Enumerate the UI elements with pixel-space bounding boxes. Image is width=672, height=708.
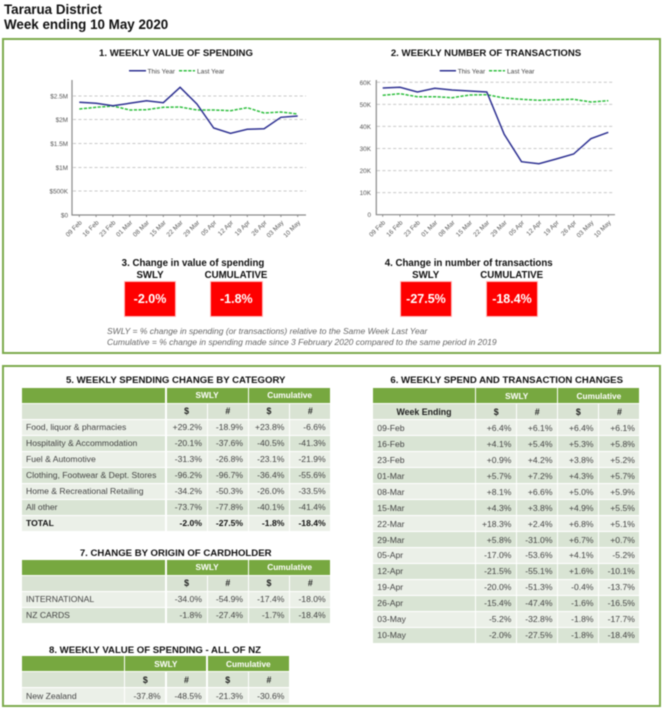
table: weekly spend and transaction changes: +6.4% bbox=[569, 423, 594, 433]
line chart: weekly number of transactions: Last Year bbox=[507, 68, 535, 75]
table: weekly spend and transaction changes: +2.4% bbox=[528, 519, 552, 529]
table: weekly spend and transaction changes: 19-Apr bbox=[377, 582, 403, 592]
table: weekly spend and transaction changes: 01-Mar bbox=[377, 471, 405, 481]
table: weekly spend and transaction changes: -53.6% bbox=[525, 550, 552, 560]
heading: chart 1: 1. WEEKLY VALUE OF SPENDING bbox=[99, 48, 253, 58]
table: weekly spending change by category: Food, liquor & pharmacies bbox=[26, 422, 126, 432]
table: weekly spending change by category: TOTAL bbox=[26, 518, 54, 528]
table: weekly spend and transaction changes: -16.5% bbox=[608, 598, 635, 608]
table: weekly spend and transaction changes: +6.7% bbox=[569, 534, 594, 544]
table: weekly spend and transaction changes: -21.5% bbox=[484, 566, 511, 576]
line chart: weekly value of spending: $500K bbox=[50, 188, 69, 196]
table: weekly spend and transaction changes: +0.9% bbox=[487, 455, 511, 465]
table: weekly spending change by category: -20.1% bbox=[175, 438, 202, 448]
table: weekly value of spending, all of NZ: Cumulative bbox=[226, 659, 271, 669]
table: weekly spending change by category: -26.0% bbox=[257, 486, 284, 496]
line chart: weekly number of transactions: 23 Feb bbox=[403, 219, 422, 238]
line chart: weekly number of transactions: 40K bbox=[360, 124, 372, 131]
line chart: weekly value of spending: Last Year bbox=[197, 68, 225, 75]
table: weekly spend and transaction changes: +5.2% bbox=[610, 455, 635, 465]
table: change by origin of cardholder: -34.0% bbox=[175, 594, 202, 604]
line chart: weekly value of spending: 26 Apr bbox=[250, 219, 269, 237]
label: cumulative transactions: CUMULATIVE bbox=[480, 270, 543, 281]
table: weekly spending change by category: Fuel & Automotive bbox=[26, 454, 96, 464]
line chart: weekly value of spending: 09 Feb bbox=[65, 219, 84, 238]
table: weekly spend and transaction changes: +5.8% bbox=[487, 534, 511, 544]
table: weekly spend and transaction changes: +5.9% bbox=[610, 487, 635, 497]
table: weekly spend and transaction changes: 23-Feb bbox=[377, 455, 405, 465]
line chart: weekly number of transactions bbox=[359, 68, 616, 239]
table: weekly spending change by category: -6.6% bbox=[303, 422, 326, 432]
table: weekly value of spending, all of NZ: $ bbox=[143, 675, 148, 685]
table: weekly spend and transaction changes: +6.8% bbox=[569, 519, 594, 529]
table: weekly spend and transaction changes: +5.3% bbox=[569, 439, 594, 449]
table: weekly spend and transaction changes: +8.1% bbox=[487, 487, 511, 497]
line chart: weekly value of spending: 05 Apr bbox=[200, 219, 219, 237]
table: weekly spending change by category: $ bbox=[184, 406, 189, 416]
label: SWLY spending: SWLY bbox=[136, 270, 164, 281]
table: weekly spend and transaction changes bbox=[372, 387, 640, 644]
table: weekly value of spending, all of NZ: -48.5% bbox=[175, 691, 202, 701]
table: weekly spend and transaction changes: +5.1% bbox=[610, 519, 635, 529]
KPI: spending SWLY: -2.0% bbox=[134, 292, 166, 306]
KPI: spending cumulative: -1.8% bbox=[220, 292, 253, 306]
line chart: weekly number of transactions: 10 May bbox=[593, 219, 613, 239]
KPI: transactions SWLY bbox=[400, 281, 452, 317]
table: weekly spend and transaction changes: 08-Mar bbox=[377, 487, 405, 497]
table: weekly spend and transaction changes: +6.4% bbox=[487, 423, 511, 433]
heading: table 7: 7. CHANGE BY ORIGIN OF CARDHOLDER bbox=[80, 548, 272, 559]
footnote: definitions: SWLY = % change in spending (or transactions) relative to the Same Week Last Year bbox=[107, 326, 427, 336]
line chart: weekly number of transactions: 0 bbox=[367, 212, 371, 219]
table: weekly spending change by category: Cumulative bbox=[267, 390, 312, 400]
table: weekly spend and transaction changes: +3.8% bbox=[569, 455, 594, 465]
table: weekly spend and transaction changes: 16-Feb bbox=[377, 439, 405, 449]
line chart: weekly number of transactions: 05 Apr bbox=[508, 219, 527, 237]
table: weekly spend and transaction changes: -2.0% bbox=[489, 630, 511, 640]
line chart: weekly value of spending: $0 bbox=[61, 212, 68, 220]
table: weekly spend and transaction changes: -15.4% bbox=[484, 598, 511, 608]
table: weekly spending change by category: -96.7% bbox=[216, 470, 243, 480]
table: weekly spend and transaction changes: +4.1% bbox=[569, 550, 594, 560]
panel: tables bbox=[2, 365, 661, 707]
table: change by origin of cardholder: $ bbox=[184, 578, 189, 588]
line chart: weekly value of spending: 12 Apr bbox=[217, 219, 236, 237]
table: weekly spend and transaction changes: +4.3% bbox=[487, 503, 511, 513]
table: weekly spend and transaction changes: -1.6% bbox=[571, 598, 594, 608]
line chart: weekly value of spending: 22 Mar bbox=[165, 219, 185, 238]
table: weekly spend and transaction changes: -20.0% bbox=[484, 582, 511, 592]
table: weekly spend and transaction changes: -5.2% bbox=[489, 614, 511, 624]
table: weekly spend and transaction changes: 03-May bbox=[377, 614, 406, 624]
table: weekly spend and transaction changes: $ bbox=[494, 407, 499, 417]
table: weekly spend and transaction changes: 15-Mar bbox=[377, 503, 405, 513]
line chart: weekly number of transactions: 30K bbox=[360, 146, 372, 153]
table: change by origin of cardholder: -18.0% bbox=[298, 594, 326, 604]
line chart: weekly value of spending: $1M bbox=[56, 165, 68, 172]
table: weekly spending change by category: -23.1% bbox=[257, 454, 284, 464]
line chart: weekly value of spending bbox=[49, 68, 306, 239]
table: weekly spend and transaction changes: 09-Feb bbox=[377, 423, 405, 433]
table: weekly spend and transaction changes: -27.5% bbox=[525, 630, 552, 640]
table: weekly spend and transaction changes: +7.2% bbox=[528, 471, 552, 481]
table: weekly spending change by category: -40.1% bbox=[257, 502, 284, 512]
line chart: weekly number of transactions: 20K bbox=[360, 168, 372, 175]
table: weekly spending change by category: -34.2% bbox=[175, 486, 202, 496]
table: weekly spend and transaction changes: 29-Mar bbox=[377, 534, 405, 544]
table: weekly spending change by category: -2.0% bbox=[180, 518, 202, 528]
line chart: weekly number of transactions: 29 Mar bbox=[490, 219, 509, 238]
title: Tararua District, week ending 10 May 2020: Week ending 10 May 2020 bbox=[4, 17, 168, 32]
table: weekly spending change by category: -18.4% bbox=[298, 518, 326, 528]
heading: change in number of transactions: 4. Change in number of transactions bbox=[385, 258, 553, 268]
line chart: weekly value of spending: 29 Mar bbox=[182, 219, 202, 238]
line chart: weekly number of transactions: 15 Mar bbox=[455, 219, 475, 238]
table: weekly spending change by category: -77.8% bbox=[216, 502, 243, 512]
table: weekly value of spending, all of NZ: # bbox=[184, 675, 189, 685]
table: weekly spend and transaction changes: +4.9% bbox=[569, 503, 594, 513]
table: weekly spend and transaction changes: -1.8% bbox=[571, 630, 594, 640]
line chart: weekly value of spending: 10 May bbox=[282, 219, 303, 239]
heading: table 6: 6. WEEKLY SPEND AND TRANSACTION CHANGES bbox=[390, 374, 623, 386]
table: weekly value of spending, all of NZ bbox=[21, 655, 290, 703]
table: weekly spend and transaction changes: +6.6% bbox=[528, 487, 552, 497]
table: weekly spend and transaction changes: $ bbox=[576, 407, 581, 417]
title: Tararua District, week ending 10 May 2020 bbox=[3, 2, 168, 33]
table: weekly spending change by category: -41.4% bbox=[298, 502, 326, 512]
table: weekly spend and transaction changes: +5.7% bbox=[487, 471, 511, 481]
table: weekly spending change by category: +29.2% bbox=[173, 422, 202, 432]
table: weekly spending change by category: Hospitality & Accommodation bbox=[26, 438, 137, 448]
table: weekly spending change by category: -73.7% bbox=[175, 502, 202, 512]
line chart: weekly value of spending: 01 Mar bbox=[115, 219, 135, 238]
table: weekly spend and transaction changes: -31.0% bbox=[525, 534, 552, 544]
table: change by origin of cardholder: -1.8% bbox=[180, 610, 202, 620]
table: weekly spend and transaction changes: +5.7% bbox=[610, 471, 635, 481]
table: weekly spend and transaction changes: -55.1% bbox=[525, 566, 552, 576]
table: weekly spend and transaction changes: +3.8% bbox=[528, 503, 552, 513]
label: cumulative spending: CUMULATIVE bbox=[205, 270, 267, 281]
line chart: weekly number of transactions: 60K bbox=[360, 80, 372, 87]
table: weekly spend and transaction changes: 05-Apr bbox=[377, 550, 403, 560]
table: weekly spend and transaction changes: 26-Apr bbox=[377, 598, 403, 608]
table: weekly spending change by category: +23.8% bbox=[255, 422, 284, 432]
table: weekly spend and transaction changes: -17.7% bbox=[608, 614, 635, 624]
line chart: weekly number of transactions: This Year bbox=[458, 68, 486, 75]
table: weekly spend and transaction changes: +5.5% bbox=[610, 503, 635, 513]
KPI: spending SWLY bbox=[124, 281, 176, 317]
table: weekly spend and transaction changes: +4.3% bbox=[569, 471, 594, 481]
line chart: weekly number of transactions: 26 Apr bbox=[560, 219, 579, 237]
table: weekly spending change by category bbox=[21, 387, 331, 531]
label: SWLY transactions: SWLY bbox=[412, 270, 439, 281]
table: weekly spending change by category: -96.2% bbox=[175, 470, 202, 480]
KPI: transactions cumulative bbox=[486, 281, 538, 317]
table: weekly spending change by category: -37.6% bbox=[216, 438, 243, 448]
table: change by origin of cardholder: NZ CARDS bbox=[26, 610, 70, 620]
table: weekly spending change by category: -21.9% bbox=[298, 454, 326, 464]
table: weekly spend and transaction changes: +5.0% bbox=[569, 487, 594, 497]
line chart: weekly value of spending: $2M bbox=[56, 117, 68, 124]
line chart: weekly number of transactions: 09 Feb bbox=[368, 219, 387, 238]
table: weekly spending change by category: -1.8% bbox=[262, 518, 284, 528]
table: weekly spend and transaction changes: +1.6% bbox=[569, 566, 594, 576]
table: weekly value of spending, all of NZ: SWLY bbox=[154, 659, 177, 669]
table: weekly spend and transaction changes: # bbox=[617, 407, 622, 417]
line chart: weekly value of spending: 15 Mar bbox=[149, 219, 168, 238]
line chart: weekly number of transactions: 19 Apr bbox=[543, 219, 561, 237]
table: change by origin of cardholder: $ bbox=[267, 578, 271, 588]
line chart: weekly number of transactions: 08 Mar bbox=[437, 219, 457, 238]
table: weekly value of spending, all of NZ: -21.3% bbox=[216, 691, 243, 701]
line chart: weekly value of spending: This Year bbox=[148, 68, 176, 75]
table: weekly spend and transaction changes: +5.4% bbox=[528, 439, 552, 449]
table: weekly spend and transaction changes: 10-May bbox=[377, 630, 406, 640]
table: change by origin of cardholder: Cumulative bbox=[267, 562, 312, 572]
table: change by origin of cardholder: # bbox=[225, 578, 230, 588]
line chart: weekly number of transactions: 12 Apr bbox=[525, 219, 544, 237]
table: weekly value of spending, all of NZ: -37.8% bbox=[133, 691, 161, 701]
table: weekly spend and transaction changes: -1.8% bbox=[571, 614, 594, 624]
line chart: weekly value of spending: 03 May bbox=[266, 219, 286, 239]
table: weekly spend and transaction changes: Cumulative bbox=[577, 391, 621, 401]
table: weekly spending change by category: -55.6% bbox=[298, 470, 326, 480]
table: weekly spending change by category: -50.3% bbox=[216, 486, 243, 496]
table: change by origin of cardholder: SWLY bbox=[196, 562, 219, 572]
table: weekly spending change by category: -36.4% bbox=[257, 470, 284, 480]
table: weekly spending change by category: Clothing, Footwear & Dept. Stores bbox=[26, 470, 156, 480]
table: weekly spending change by category: # bbox=[308, 406, 313, 416]
table: change by origin of cardholder: -27.4% bbox=[216, 610, 243, 620]
table: weekly spend and transaction changes: +0.7% bbox=[610, 534, 635, 544]
line chart: weekly value of spending: $1.5M bbox=[50, 141, 68, 148]
KPI: transactions cumulative: -18.4% bbox=[492, 292, 532, 306]
table: weekly value of spending, all of NZ: -30.6% bbox=[257, 691, 284, 701]
table: weekly spend and transaction changes: +6.1% bbox=[528, 423, 552, 433]
table: weekly spending change by category: -18.9% bbox=[216, 422, 243, 432]
table: weekly spending change by category: -40.5% bbox=[257, 438, 284, 448]
table: weekly spending change by category: SWLY bbox=[196, 390, 219, 400]
table: weekly spend and transaction changes: -13.7% bbox=[608, 582, 635, 592]
table: weekly spend and transaction changes: -18.4% bbox=[608, 630, 635, 640]
table: weekly value of spending, all of NZ: # bbox=[267, 675, 271, 685]
footnote: definitions bbox=[106, 326, 498, 348]
table: weekly spend and transaction changes: -0.4% bbox=[571, 582, 594, 592]
table: weekly spend and transaction changes: Week Ending bbox=[396, 407, 452, 417]
table: weekly spending change by category: $ bbox=[267, 406, 271, 416]
table: weekly spend and transaction changes: +18.3% bbox=[482, 519, 511, 529]
table: weekly spend and transaction changes: # bbox=[535, 407, 540, 417]
line chart: weekly value of spending: 19 Apr bbox=[234, 219, 252, 237]
line chart: weekly value of spending: 08 Mar bbox=[132, 219, 152, 238]
table: weekly spending change by category: -31.3% bbox=[175, 454, 202, 464]
table: weekly spend and transaction changes: 22-Mar bbox=[377, 519, 405, 529]
line chart: weekly number of transactions: 03 May bbox=[576, 219, 596, 239]
table: change by origin of cardholder: # bbox=[308, 578, 313, 588]
line chart: weekly number of transactions: 22 Mar bbox=[472, 219, 492, 238]
table: weekly spend and transaction changes: -10.1% bbox=[608, 566, 635, 576]
table: weekly spend and transaction changes: SWLY bbox=[505, 391, 528, 401]
footnote: definitions: Cumulative = % change in spending made since 3 February 2020 compared to the same period in 2019 bbox=[107, 337, 497, 347]
line chart: weekly number of transactions: 10K bbox=[360, 190, 372, 197]
line chart: weekly number of transactions: 50K bbox=[360, 102, 372, 109]
heading: table 8: 8. WEEKLY VALUE OF SPENDING - ALL OF NZ bbox=[49, 644, 261, 656]
title: Tararua District, week ending 10 May 2020: Tararua District bbox=[4, 2, 102, 16]
heading: chart 2: 2. WEEKLY NUMBER OF TRANSACTIONS bbox=[391, 48, 581, 58]
KPI: transactions SWLY: -27.5% bbox=[406, 292, 446, 306]
heading: table 5: 5. WEEKLY SPENDING CHANGE BY CATEGORY bbox=[66, 374, 285, 386]
table: change by origin of cardholder: -54.9% bbox=[216, 594, 243, 604]
line chart: weekly number of transactions: 16 Feb bbox=[385, 219, 405, 238]
table: change by origin of cardholder: INTERNATIONAL bbox=[26, 594, 94, 604]
table: weekly spend and transaction changes: -51.3% bbox=[525, 582, 552, 592]
KPI: spending cumulative bbox=[210, 281, 263, 317]
table: change by origin of cardholder: -18.4% bbox=[298, 610, 326, 620]
table: weekly spending change by category: -27.5% bbox=[216, 518, 243, 528]
table: weekly spend and transaction changes: -17.0% bbox=[484, 550, 511, 560]
table: weekly spending change by category: -41.3% bbox=[298, 438, 326, 448]
table: weekly value of spending, all of NZ: $ bbox=[225, 675, 230, 685]
table: change by origin of cardholder: -17.4% bbox=[257, 594, 284, 604]
line chart: weekly value of spending: 23 Feb bbox=[98, 219, 118, 238]
table: change by origin of cardholder: -1.7% bbox=[262, 610, 284, 620]
table: weekly spend and transaction changes: -47.4% bbox=[525, 598, 552, 608]
table: weekly spending change by category: # bbox=[225, 406, 230, 416]
panel: weekly spending and transactions overview bbox=[2, 38, 661, 354]
table: weekly spend and transaction changes: +4.1% bbox=[487, 439, 511, 449]
table: weekly spending change by category: -26.8% bbox=[216, 454, 243, 464]
line chart: weekly number of transactions: 01 Mar bbox=[420, 219, 440, 238]
table: weekly spend and transaction changes: +6.1% bbox=[610, 423, 635, 433]
heading: change in value of spending: 3. Change in value of spending bbox=[122, 258, 264, 268]
table: weekly spend and transaction changes: 12-Apr bbox=[377, 566, 403, 576]
line chart: weekly value of spending: 16 Feb bbox=[81, 219, 101, 238]
table: weekly value of spending, all of NZ: New Zealand bbox=[26, 691, 77, 701]
table: weekly spend and transaction changes: -5.2% bbox=[612, 550, 635, 560]
table: change by origin of cardholder bbox=[21, 559, 331, 624]
table: weekly spending change by category: -33.5% bbox=[298, 486, 326, 496]
table: weekly spend and transaction changes: +4.2% bbox=[528, 455, 552, 465]
table: weekly spend and transaction changes: -32.8% bbox=[525, 614, 552, 624]
table: weekly spend and transaction changes: +5.8% bbox=[610, 439, 635, 449]
line chart: weekly value of spending: $2.5M bbox=[50, 94, 68, 100]
table: weekly spending change by category: Home & Recreational Retailing bbox=[26, 486, 144, 496]
table: weekly spending change by category: All other bbox=[26, 502, 58, 512]
